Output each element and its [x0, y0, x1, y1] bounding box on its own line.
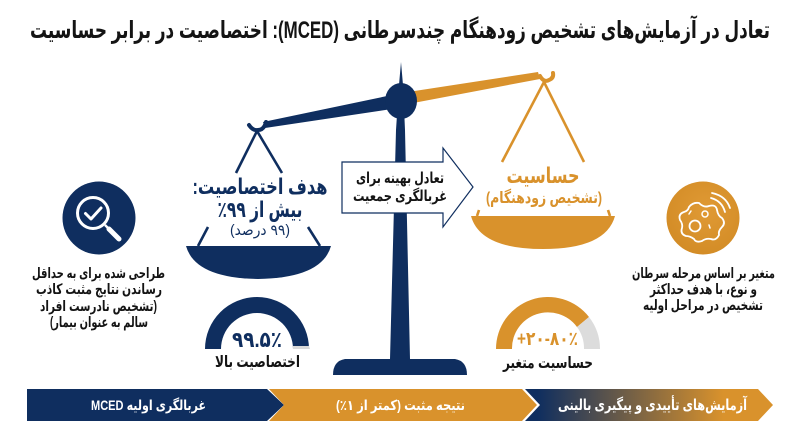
scale beam: gold side — [408, 72, 540, 104]
right description text — [632, 266, 775, 314]
process step 2: نتیجه مثبت (کمتر از ۱٪) — [336, 397, 465, 414]
right pan tabs — [477, 210, 610, 216]
left pan label: (۹۹ درصد) — [230, 222, 290, 239]
left pan label — [192, 174, 328, 239]
right pan label — [486, 163, 602, 207]
process step 3 — [525, 389, 773, 421]
left description text: (تشخیص نادرست افراد — [40, 299, 157, 315]
icon: cancer cell — [666, 182, 740, 254]
process step 1: غربالگری اولیه MCED — [91, 397, 206, 414]
gauge: sensitivity: حساسیت متغیر — [502, 355, 593, 372]
left description text: سالم به عنوان بیمار) — [50, 315, 148, 331]
gauge: specificity — [205, 297, 310, 371]
process step 1 — [27, 389, 284, 421]
right description text: و نوع، با هدف حداکثر — [649, 282, 757, 298]
right pan — [471, 216, 615, 249]
icon: magnifier with check — [62, 182, 136, 254]
center arrow callout — [342, 148, 473, 227]
left description text — [32, 266, 165, 331]
left pan label: بیش از ۹۹٪ — [218, 197, 302, 222]
left description text: رساندن نتایج مثبت کاذب — [36, 282, 162, 298]
gauge: sensitivity — [496, 297, 600, 372]
scale beam: navy side — [263, 95, 392, 128]
left hook — [249, 122, 266, 130]
balance scale — [186, 62, 615, 375]
center arrow callout: غربالگری جمعیت — [353, 187, 447, 205]
gauge: specificity: اختصاصیت بالا — [215, 354, 300, 371]
gauge: sensitivity: +۲۰-۸۰٪ — [517, 329, 578, 350]
left pan label: هدف اختصاصیت: — [192, 174, 328, 199]
right pan label: (تشخیص زودهنگام) — [486, 188, 602, 207]
scale pillar and base — [333, 62, 467, 375]
scale pivot — [385, 83, 417, 119]
right hook — [540, 73, 553, 81]
process step 2 — [269, 389, 537, 421]
center arrow callout: تعادل بهینه برای — [356, 170, 444, 187]
right pan label: حساسیت — [506, 163, 580, 188]
right upper strings — [502, 82, 584, 162]
gauge: specificity: ۹۹.۵٪ — [232, 327, 282, 352]
left upper strings — [236, 131, 282, 173]
left description text: طراحی شده برای به حداقل — [32, 266, 165, 282]
left pan — [186, 246, 331, 279]
left lower strings — [198, 227, 320, 246]
